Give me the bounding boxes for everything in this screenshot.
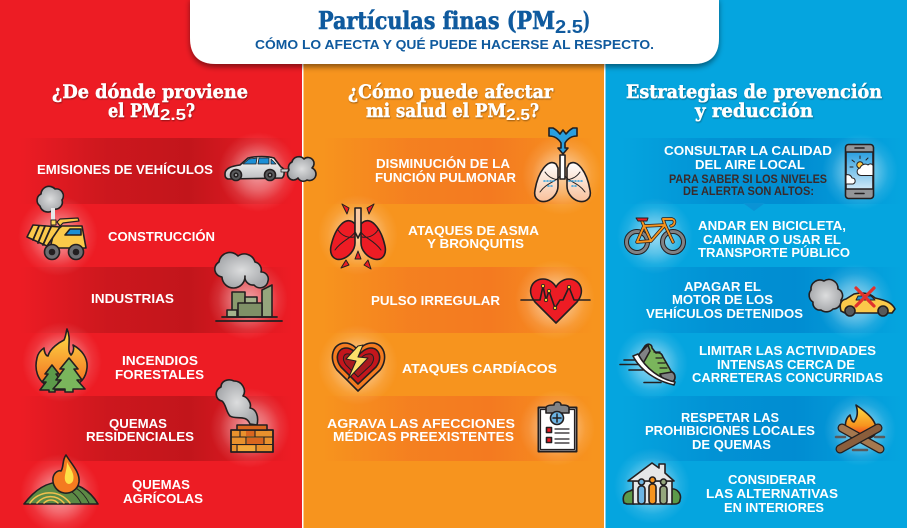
title banner [190,0,719,64]
icon: brick chimney with smoke [216,380,273,452]
label: quemas residenciales: RESIDENCIALES [86,429,194,444]
label: ataques cardíacos: ATAQUES CARDÍACOS [402,361,557,376]
icon: medical clipboard [538,402,576,452]
label: quemas agrícolas: AGRÍCOLAS [123,491,203,506]
icon: inflamed red lungs [331,204,385,269]
label: emisiones de vehículos: EMISIONES DE VEHÍCULOS [37,162,213,177]
label: limitar las actividades intensas: LIMITAR LAS ACTIVIDADES [699,343,876,358]
heading: estrategias de prevención y reducción [626,81,882,122]
label: apagar el motor de los vehículos detenidos [646,279,803,321]
label: agrava las afecciones médicas preexistentes: AGRAVA LAS AFECCIONES [327,416,515,431]
label: considerar las alternativas en interiores: CONSIDERAR [728,472,817,487]
label: agrava las afecciones médicas preexistentes [327,416,515,444]
label: respetar las prohibiciones locales de quemas: DE QUEMAS [692,437,771,452]
label: disminución de la función pulmonar [375,156,517,185]
label: disminución de la función pulmonar: FUNCIÓN PULMONAR [375,170,517,185]
icon: factory with smoke [215,252,282,321]
icon: running shoe [620,344,675,385]
panel: health effects [302,0,604,528]
heading: ¿Cómo puede afectar mi salud el PM2.5?: mi salud el PM [366,100,506,122]
label: andar en bicicleta [698,218,850,260]
label: considerar las alternativas en interiores: LAS ALTERNATIVAS [706,486,838,501]
label: incendios forestales: FORESTALES [115,367,204,382]
label: quemas residenciales: QUEMAS [109,416,167,431]
title: Partículas finas (PM2.5): 2.5 [555,17,583,37]
icon: house with people [623,463,680,504]
title: Partículas finas (PM2.5): ) [583,6,590,35]
label: consultar la calidad del aire local: DEL AIRE LOCAL [695,157,805,172]
title: Partículas finas (PM2.5): Partículas finas (PM [318,6,555,35]
icon: dump truck [27,186,86,260]
icon: bicycle [626,218,684,252]
label: pulso irregular: PULSO IRREGULAR [371,293,501,308]
heading: estrategias de prevención y reducción: Estrategias de prevención [626,81,882,103]
label: ataques de asma y bronquitis [408,223,540,251]
label: andar en bicicleta: CAMINAR O USAR EL [703,232,841,247]
icon: smartphone with weather [846,144,874,198]
label: respetar las prohibiciones locales de quemas [645,410,815,452]
label: respetar las prohibiciones locales de quemas: RESPETAR LAS [681,410,779,425]
label: consultar la calidad del aire local: CONSULTAR LA CALIDAD [664,143,832,158]
label: quemas residenciales [86,416,194,444]
label: apagar el motor de los vehículos detenidos: APAGAR EL [684,279,761,294]
label: ataques de asma y bronquitis: Y BRONQUITIS [427,236,524,251]
heading: ¿Cómo puede afectar mi salud el PM2.5?: ¿Cómo puede afectar [348,81,554,103]
heading: ¿Cómo puede afectar mi salud el PM2.5? [348,81,554,124]
panel: prevention strategies [604,0,907,528]
icon: heart with irregular pulse [521,279,590,323]
label: limitar las actividades intensas: INTENSAS CERCA DE [717,357,855,372]
icon: forest fire [36,329,87,392]
heading: ¿De dónde proviene el PM2.5?: ? [186,100,195,122]
label: andar en bicicleta: ANDAR EN BICICLETA, [698,218,846,233]
icon: burning field [24,455,98,504]
heading: ¿De dónde proviene el PM2.5?: ¿De dónde proviene [52,81,248,103]
heading: ¿De dónde proviene el PM2.5?: el PM [108,100,160,122]
label: quemas agrícolas: QUEMAS [132,477,190,492]
icon: campfire [836,405,884,450]
icon: idling car crossed out [809,279,895,316]
label: respetar las prohibiciones locales de quemas: PROHIBICIONES LOCALES [645,423,815,438]
icon: broken heart with lightning [332,343,385,391]
label: incendios forestales: INCENDIOS [122,353,198,368]
label: ataques de asma y bronquitis: ATAQUES DE ASMA [408,223,540,238]
label: agrava las afecciones médicas preexistentes: MÉDICAS PREEXISTENTES [333,429,514,444]
label: disminución de la función pulmonar: DISMINUCIÓN DE LA [376,156,511,171]
label: consultar la calidad del aire local [664,143,832,198]
label: considerar las alternativas en interiores: EN INTERIORES [724,500,824,515]
label: andar en bicicleta: TRANSPORTE PÚBLICO [698,245,850,260]
label: limitar las actividades intensas: CARRETERAS CONCURRIDAS [692,370,883,385]
label: consultar la calidad del aire local: DE ALERTA SON ALTOS: [683,186,814,198]
icon: car with exhaust [225,156,316,181]
label: consultar la calidad del aire local: PARA SABER SI LOS NIVELES [669,174,827,186]
label: industrias: INDUSTRIAS [91,291,174,306]
label: apagar el motor de los vehículos detenidos: MOTOR DE LOS [672,292,773,307]
heading: ¿Cómo puede afectar mi salud el PM2.5?: 2.5 [506,107,530,124]
heading: ¿De dónde proviene el PM2.5?: 2.5 [160,107,186,124]
panel: sources of PM2.5 [0,0,316,528]
icon: lungs with air arrows [535,128,590,202]
heading: ¿De dónde proviene el PM2.5? [52,81,248,124]
label: incendios forestales [115,353,204,382]
label: limitar las actividades intensas [692,343,883,385]
label: construcción: CONSTRUCCIÓN [108,229,215,244]
label: considerar las alternativas en interiores [706,472,838,515]
subtitle: CÓMO LO AFECTA Y QUÉ PUEDE HACERSE AL RESPECTO. [255,37,654,52]
label: quemas agrícolas [123,477,203,506]
heading: ¿Cómo puede afectar mi salud el PM2.5?: ? [530,100,539,122]
label: apagar el motor de los vehículos detenidos: VEHÍCULOS DETENIDOS [646,306,803,321]
heading: estrategias de prevención y reducción: y reducción [694,100,813,122]
